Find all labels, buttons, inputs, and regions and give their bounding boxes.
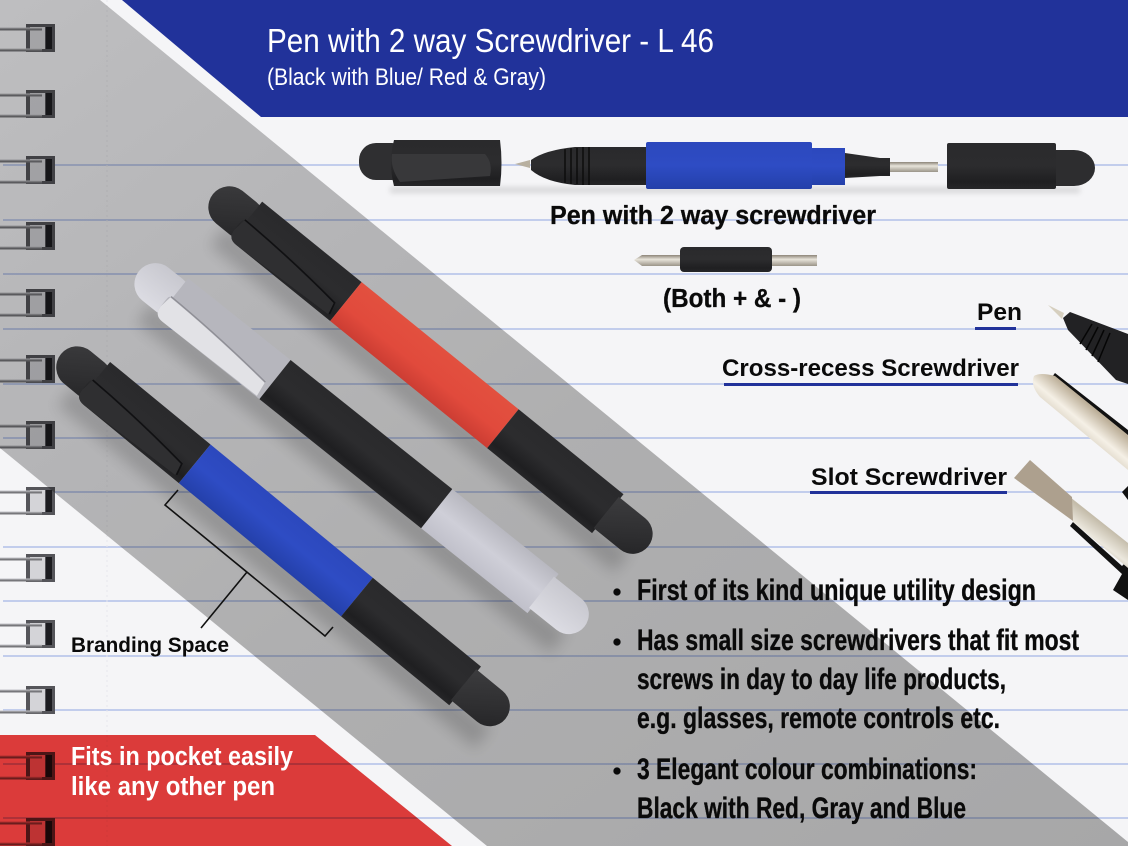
- right cap: [947, 143, 1095, 189]
- gray pen: [113, 251, 600, 659]
- branding space bracket: [165, 490, 333, 636]
- product caption: Pen with 2 way screwdriver: [550, 202, 876, 230]
- red banner text: Fits in pocket easily: [71, 743, 294, 771]
- label: slot screwdriver: Slot Screwdriver: [811, 464, 1007, 491]
- label: cross-recess screwdriver: Cross-recess Screwdriver: [722, 355, 1019, 382]
- red banner text: like any other pen: [71, 773, 275, 801]
- title: Pen with 2 way Screwdriver - L 46: [267, 22, 714, 59]
- subtitle: (Black with Blue/ Red & Gray): [267, 64, 546, 91]
- double-ended screwdriver bit: [634, 247, 817, 272]
- red banner text: [71, 743, 294, 801]
- red corner banner: [0, 735, 452, 846]
- bullet 3: 3 Elegant colour combinations:: [637, 753, 977, 786]
- slot screwdriver close-up: [1014, 460, 1128, 600]
- bit caption: (Both + & - ): [663, 285, 801, 313]
- spiral binding rings: [0, 24, 55, 846]
- bullet 3: [614, 753, 977, 825]
- bullet 2: [614, 624, 1079, 735]
- pen tip close-up: [1048, 305, 1128, 384]
- label: pen: Pen: [977, 299, 1022, 326]
- bullet 2: e.g. glasses, remote controls etc.: [637, 702, 1000, 735]
- branding space label: Branding Space: [71, 634, 229, 657]
- cross-recess screwdriver close-up: [1033, 373, 1128, 470]
- bullet 2: screws in day to day life products,: [637, 663, 1006, 696]
- feature bullet list: [614, 574, 1079, 825]
- pen body: [515, 142, 938, 189]
- left cap: [359, 140, 502, 186]
- blue header banner: [122, 0, 1128, 117]
- blue pen: [34, 335, 521, 751]
- red pen: [187, 175, 664, 579]
- bullet 3: Black with Red, Gray and Blue: [637, 792, 966, 825]
- exploded pen product view: [359, 140, 1095, 193]
